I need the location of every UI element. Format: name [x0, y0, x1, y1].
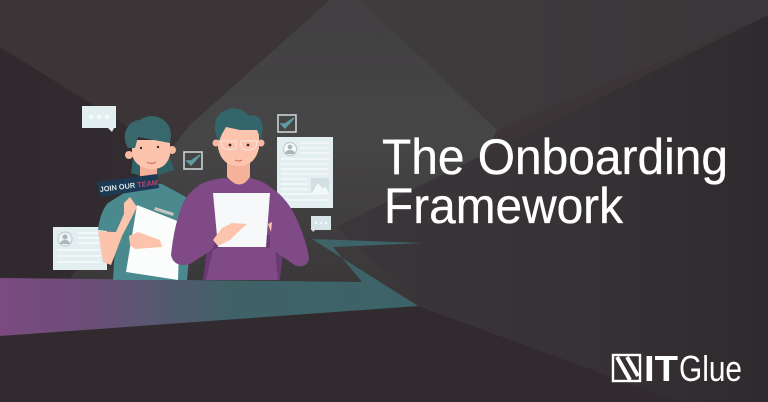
figure: woman — [97, 116, 192, 280]
glasses — [221, 141, 257, 150]
back hair — [131, 148, 174, 178]
icon: checkbox right — [278, 115, 296, 132]
torso — [203, 188, 283, 280]
arms and shoulders — [171, 178, 309, 266]
hand on tablet — [213, 223, 247, 246]
hair — [215, 108, 263, 141]
body — [98, 184, 192, 280]
wordmark: IT — [644, 348, 678, 389]
icon: small speech bubble — [311, 216, 331, 232]
document: right resume — [277, 137, 333, 208]
tablet — [213, 193, 270, 247]
hair — [125, 116, 171, 148]
figure: man — [171, 108, 309, 280]
logo mark — [613, 355, 640, 381]
title: Framework — [384, 178, 624, 234]
logo: IT Glue — [613, 348, 742, 389]
raised arm — [98, 197, 137, 265]
face — [212, 125, 264, 166]
document: left profile card — [53, 227, 107, 270]
sign: join our team: JOIN OUR TEAM — [99, 178, 159, 194]
sign: join our team — [97, 174, 159, 197]
ribbon arrow — [0, 239, 423, 336]
icon: checkbox middle — [184, 152, 202, 169]
title — [382, 129, 728, 234]
face — [125, 140, 176, 169]
title: The Onboarding — [382, 129, 728, 185]
icon: speech bubble top — [82, 106, 116, 132]
neck — [140, 165, 157, 186]
neck — [227, 160, 250, 184]
clipboard — [126, 205, 180, 280]
hand on clipboard — [129, 232, 162, 249]
logo: IT Glue: Glue — [679, 348, 742, 389]
